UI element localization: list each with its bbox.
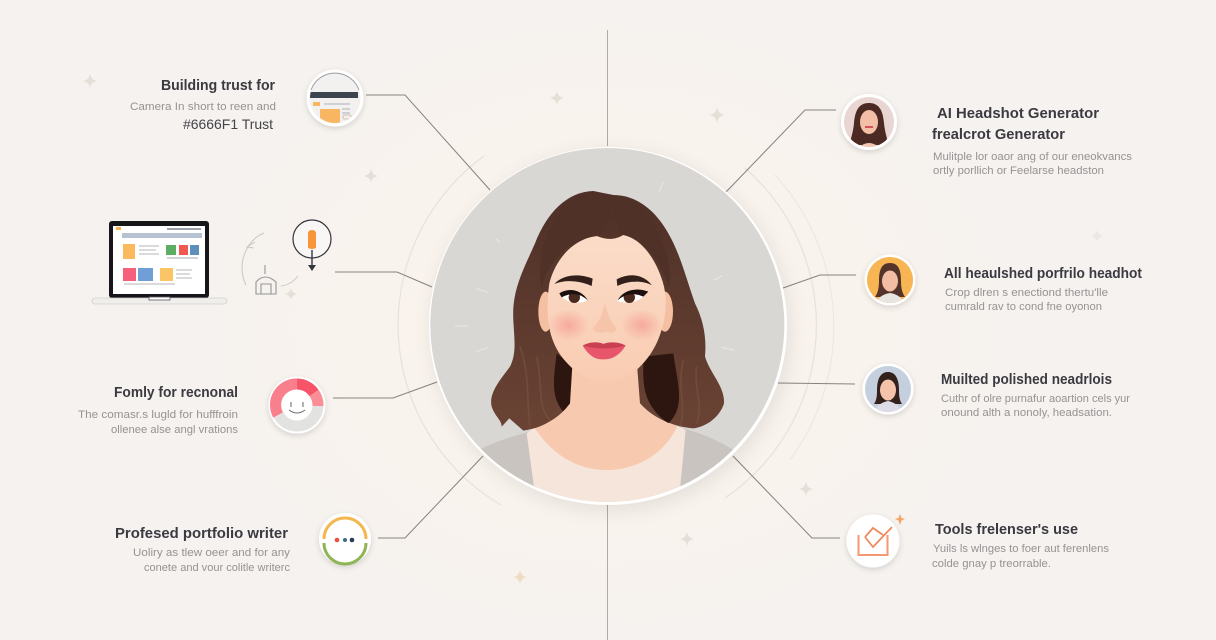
heading: Profesed portfolio writer [115,526,288,542]
orbit arcs [398,156,834,505]
description: Uoliry as tlew oeer and for any [133,547,291,559]
icon: location pin and house [242,220,331,294]
decorative sparkles [83,74,1103,584]
eyebrows [554,275,652,286]
backdrop glints [455,182,734,352]
icon: donut chart with smile [268,376,326,434]
description: Cuthr of olre purnafur aoartion cels yur [941,393,1130,405]
item: polished headshots: onound alth a nonoly, headsation. [941,407,1112,419]
item: family [78,385,239,436]
connector lines [333,95,856,538]
hair back [491,191,724,431]
description: Camera In short to reen and [130,101,276,113]
color label: #6666F1 Trust [183,116,273,132]
description: The comasr.s lugld for hufffroin [78,409,238,421]
nose [593,303,617,333]
description: Crop dlren s enectiond thertu'lle [945,287,1108,299]
description: Yuils ls wlnges to foer aut ferenlens [933,543,1110,555]
icon: dashboard badge [306,70,364,126]
item: AI headshot generator: ortly porllich or Feelarse headston [933,165,1104,177]
item: family: ollenee alse angl vrations [111,424,239,436]
description: Mulitple lor oaor ang of our eneokvancs [933,151,1133,163]
heading: Fomly for recnonal [114,385,238,401]
icon: envelope check [846,514,905,568]
avatar: pink background [840,94,900,150]
dark hair shadow [554,353,679,423]
lips [583,342,626,359]
item: tools freelancers use: colde gnay p treorrable. [932,558,1051,570]
item: AI headshot generator: frealcrot Generator [932,127,1065,143]
ears [538,292,550,332]
item: building trust [130,78,276,132]
shirt [527,426,686,507]
item: tools freelancers use [932,522,1110,570]
item: portfolio headshot [944,266,1142,313]
heading: Tools frelenser's use [935,522,1078,538]
avatar: blue background [862,364,914,414]
cheeks [552,312,584,338]
central portrait [420,140,790,510]
item: portfolio headshot: cumrald rav to cond fne oyonon [945,301,1102,313]
item: portfolio writer [115,526,291,574]
portrait backdrop [420,140,790,510]
icon: progress ring [319,513,371,565]
central axis line [606,30,608,640]
eyes [559,290,648,303]
hair front [540,194,670,288]
avatar: orange background [864,254,916,306]
heading: Muilted polished neadrlois [941,372,1112,388]
item: AI headshot generator [932,106,1133,177]
icon: laptop [92,221,227,304]
item: portfolio writer: conete and vour colitle writerc [144,562,290,574]
face [548,235,666,383]
heading: All heaulshed porfrilo headhot [944,266,1142,282]
item: polished headshots [941,372,1130,419]
heading: Building trust for [161,78,275,94]
neck [535,360,677,470]
shoulders [482,428,733,488]
hair highlights [520,346,700,427]
heading: AI Headshot Generator [937,106,1099,122]
